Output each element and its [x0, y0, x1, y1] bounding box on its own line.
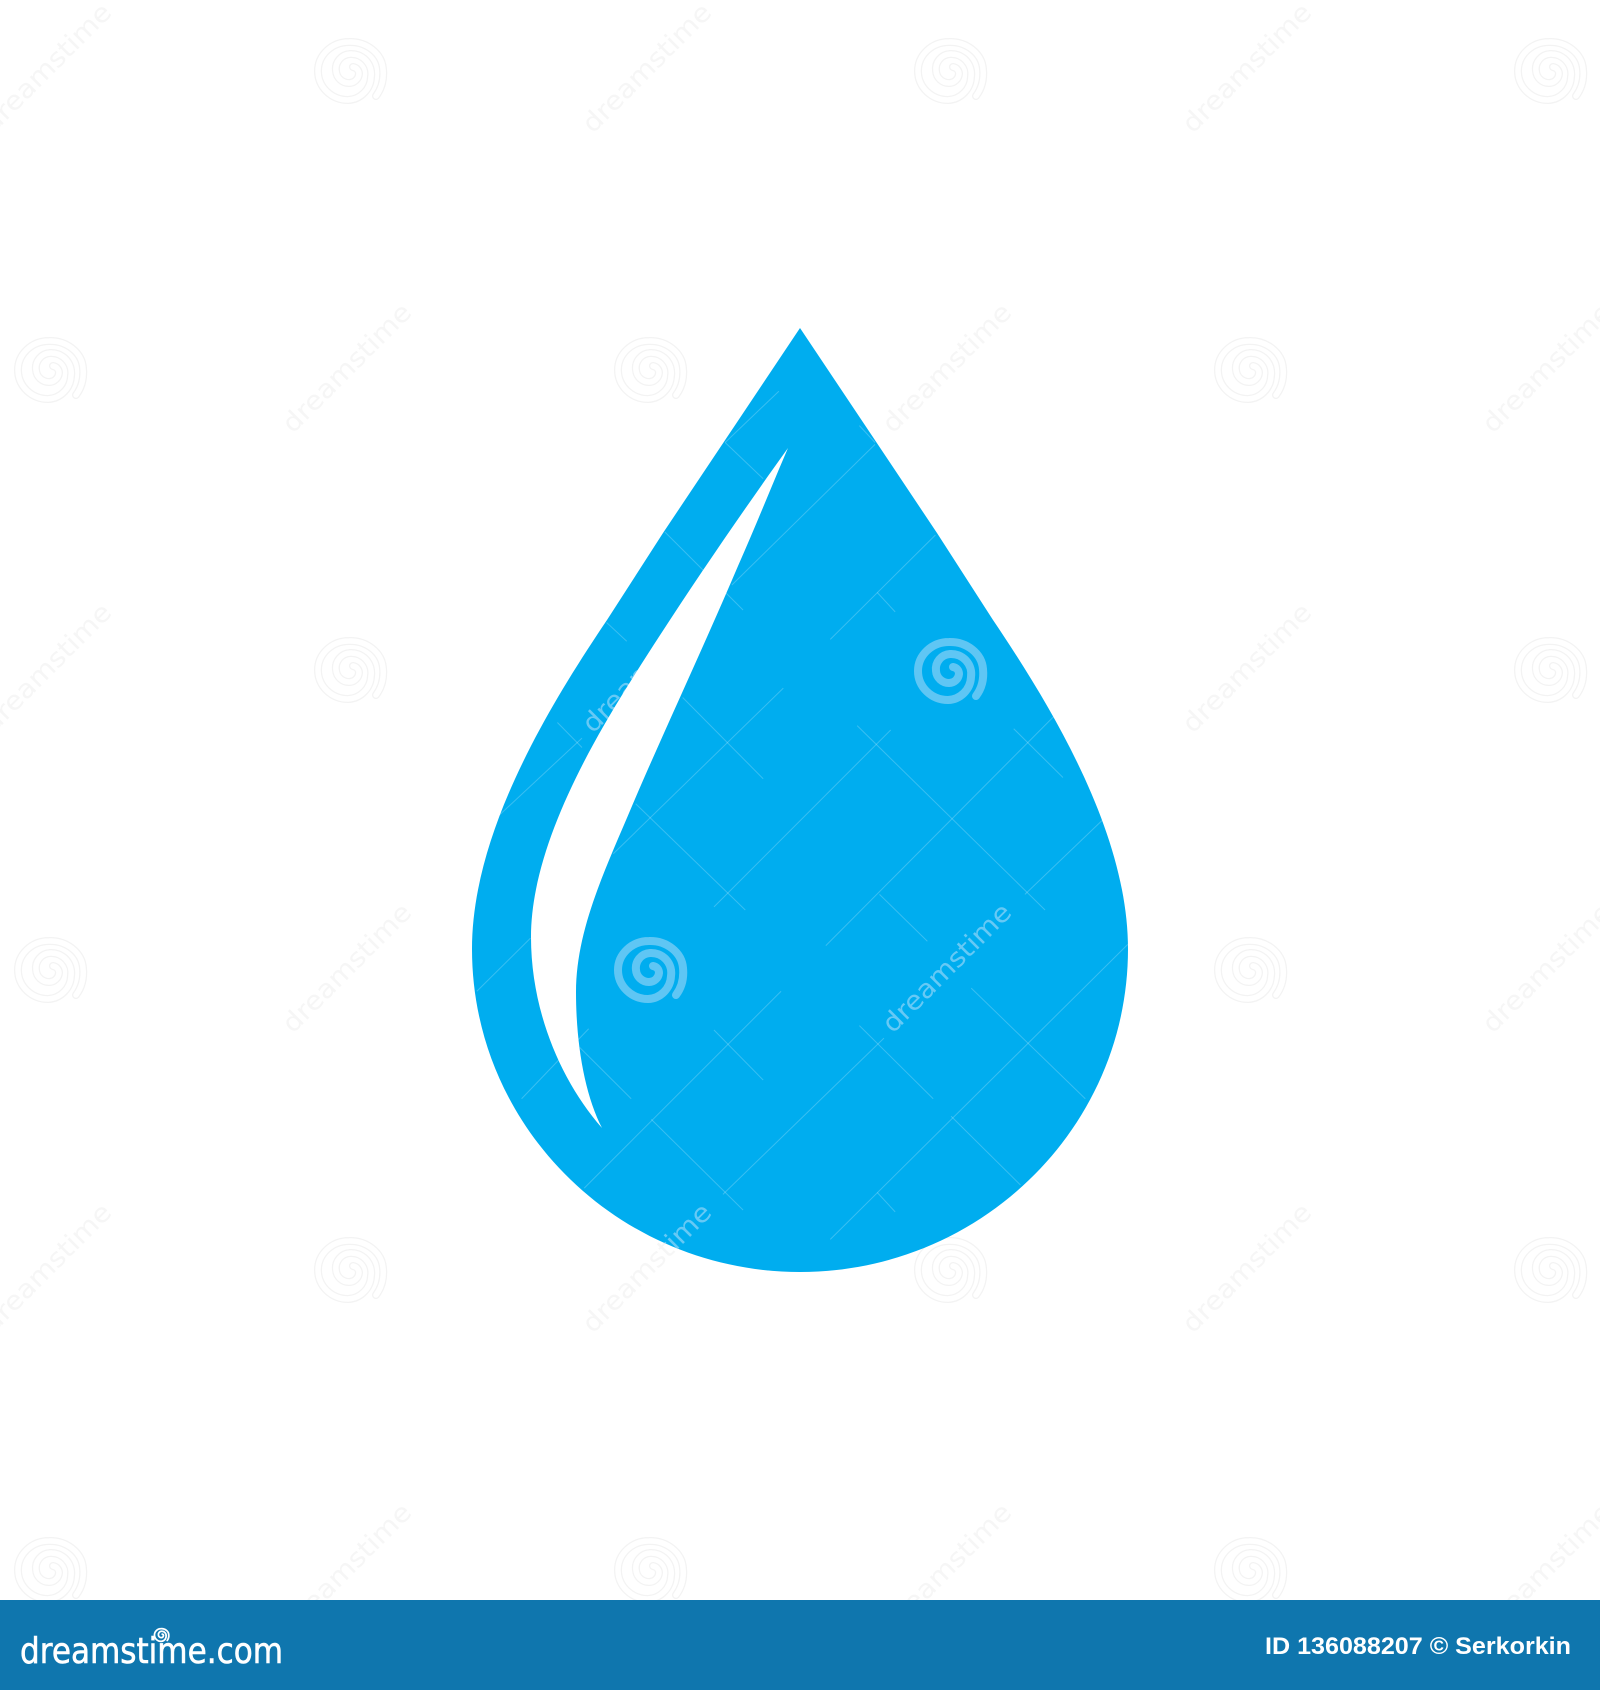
icon: water drop [472, 328, 1128, 1339]
watermark words inside drop: dreamstime [577, 598, 718, 739]
watermark pattern on white: dreamstime [1177, 1198, 1318, 1339]
footer banner [0, 1600, 1600, 1690]
watermark words inside drop: dreamstime [577, 1198, 718, 1339]
faint watermark lines inside drop [477, 391, 1128, 1339]
watermark pattern on white: dreamstime [277, 898, 418, 1039]
drop body [472, 328, 1128, 1272]
watermark spirals inside drop [618, 642, 983, 999]
watermark pattern on white: dreamstime [577, 0, 718, 139]
watermark pattern on white: dreamstime [1177, 598, 1318, 739]
watermark pattern on white: dreamstime [877, 298, 1018, 439]
drop highlight [531, 448, 788, 1128]
watermark pattern on white: dreamstime [1177, 0, 1318, 139]
watermark words inside drop: dreamstime [877, 898, 1018, 1039]
logo: dreamstime.com: dreamstime.com [20, 1631, 283, 1672]
watermark pattern on white: dreamstime [577, 1198, 718, 1339]
watermark pattern on white: dreamstime [277, 1498, 418, 1639]
image id and credit: ID 136088207 © Serkorkin [1265, 1633, 1571, 1660]
watermark pattern on white: dreamstime [877, 1498, 1018, 1639]
watermark pattern on white: dreamstime [277, 298, 418, 439]
watermark words inside drop [577, 598, 1018, 1339]
